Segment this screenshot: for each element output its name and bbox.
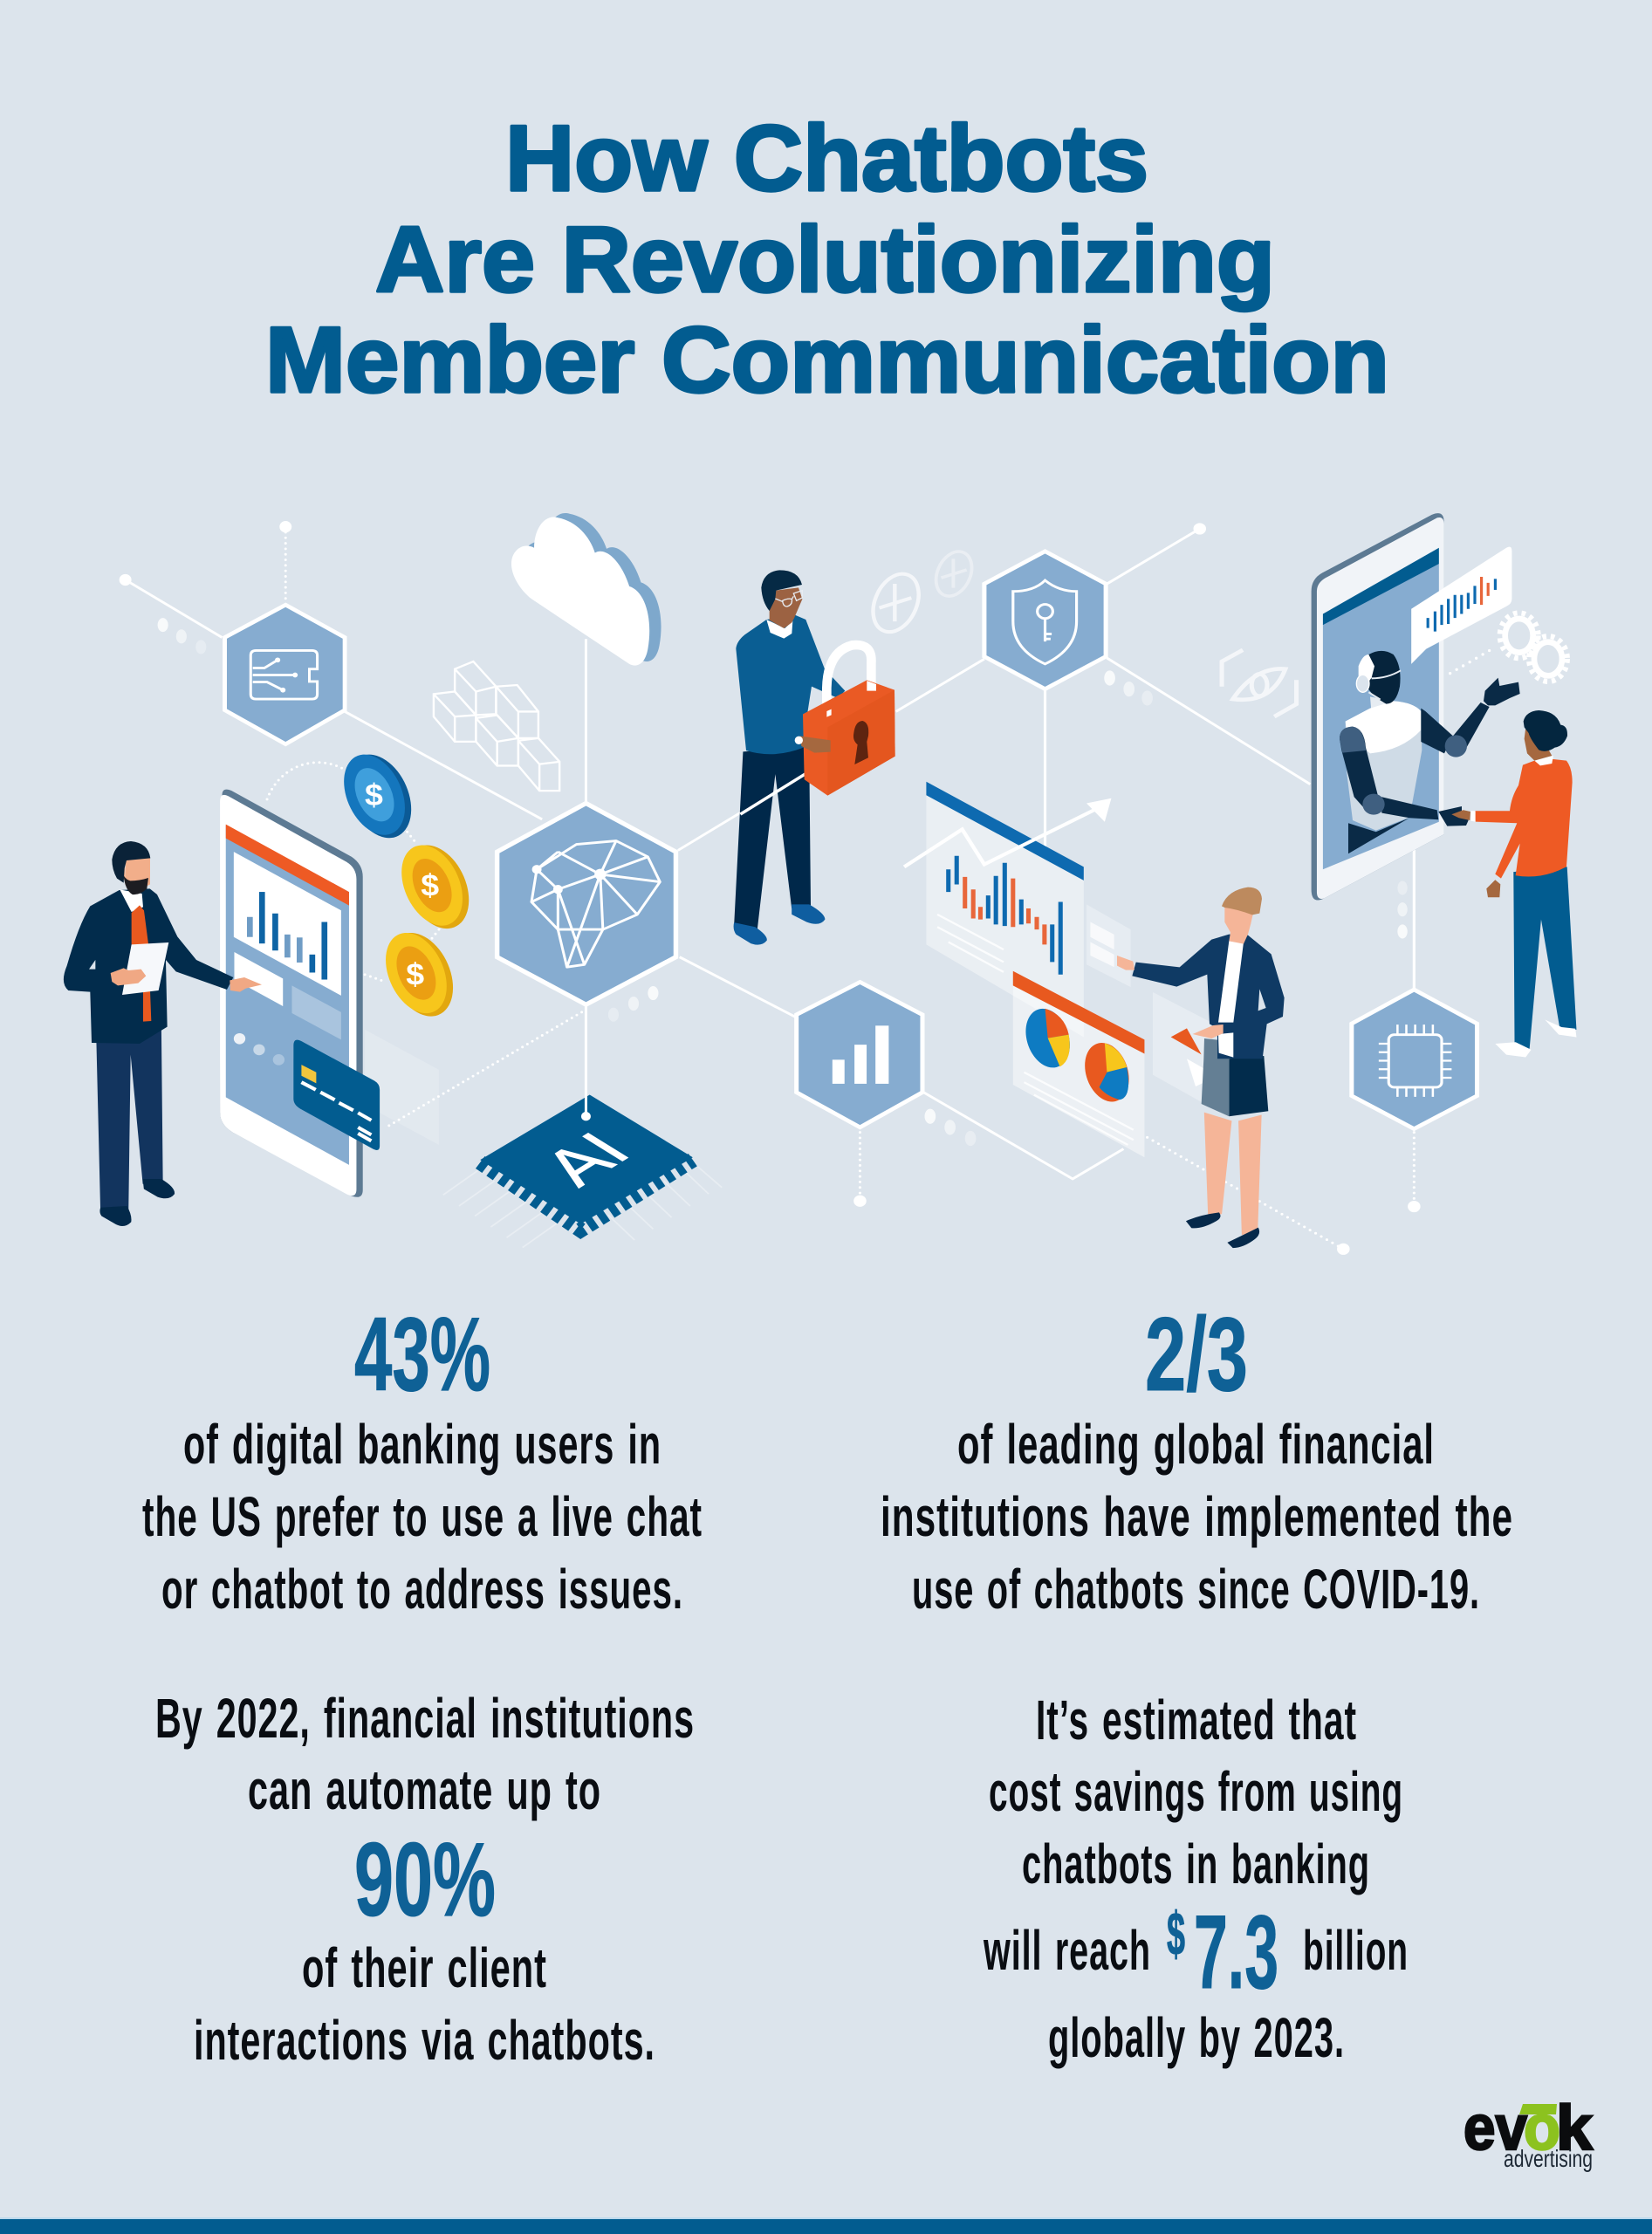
arrow bbox=[904, 798, 1111, 867]
robot and woman handshake bbox=[1340, 613, 1573, 897]
logo: evok advertising: k bbox=[1556, 2094, 1594, 2163]
woman cuff bbox=[1470, 811, 1476, 822]
stat: 7.3 billion bbox=[983, 1689, 1409, 2069]
sweater bbox=[736, 615, 845, 754]
pie chart 1 bbox=[1019, 1004, 1077, 1072]
icon: circuit hexagon bbox=[225, 605, 345, 744]
beard bbox=[124, 875, 148, 894]
stat: two thirds bbox=[881, 1296, 1513, 1621]
stat text: It’s estimated that bbox=[1036, 1689, 1357, 1751]
pointing hand bbox=[230, 977, 262, 992]
icon: plus circles bbox=[865, 547, 978, 638]
tablet screen bbox=[1323, 564, 1439, 869]
face bbox=[117, 858, 150, 890]
stat text bbox=[142, 1413, 703, 1621]
chart panel bbox=[904, 782, 1111, 1038]
lower hand bbox=[1193, 1024, 1224, 1038]
white line over legs bbox=[740, 762, 825, 814]
gold coin: $ bbox=[421, 868, 439, 902]
neck and face bbox=[1224, 906, 1254, 944]
shirt bbox=[1218, 941, 1244, 1023]
person: woman in blazer legs bbox=[1186, 1113, 1262, 1248]
person: man with glasses bbox=[736, 570, 845, 754]
icon: isometric blocks bbox=[434, 661, 559, 791]
gears bbox=[1500, 613, 1567, 682]
speech bubble bbox=[1411, 547, 1511, 664]
phone shadow panel bbox=[365, 1030, 439, 1145]
AI chip: AI bbox=[527, 1122, 646, 1196]
connector lines bbox=[855, 524, 1419, 1253]
stat text: will reach bbox=[983, 1919, 1151, 1982]
skirt bbox=[1202, 1038, 1268, 1116]
keyhole bbox=[853, 721, 868, 764]
footer bar bbox=[0, 2217, 1652, 2234]
hand on lock bbox=[800, 736, 831, 753]
stat text: can automate up to bbox=[248, 1758, 601, 1821]
stat text bbox=[983, 1689, 1409, 2069]
stat text bbox=[881, 1413, 1513, 1621]
title: Member Communication bbox=[265, 307, 1389, 412]
stat text: chatbots in banking bbox=[1022, 1833, 1370, 1895]
credit card bbox=[293, 1040, 380, 1150]
second man trousers and shoes bbox=[734, 747, 825, 945]
phone bbox=[220, 790, 363, 1197]
pie panel bbox=[1013, 971, 1144, 1157]
man trousers and shoes bbox=[96, 1022, 175, 1226]
third panel bbox=[1153, 992, 1210, 1107]
title bbox=[265, 106, 1389, 412]
stat: 90 percent bbox=[155, 1687, 695, 2072]
stat text: of digital banking users in bbox=[183, 1413, 661, 1476]
pie chart 2 bbox=[1078, 1038, 1135, 1107]
tie bbox=[132, 905, 151, 1022]
robot right arm bbox=[1421, 678, 1520, 757]
brain hexagon bbox=[497, 803, 675, 1004]
chip hexagon bbox=[1352, 990, 1477, 1129]
chart hexagon bbox=[797, 982, 922, 1127]
icon: cloud bbox=[511, 513, 661, 666]
lock body bbox=[803, 680, 895, 796]
hair bbox=[1222, 887, 1262, 915]
blue coin: $ bbox=[365, 778, 383, 812]
holding hand bbox=[111, 968, 146, 985]
stat text: By 2022, financial institutions bbox=[155, 1687, 695, 1750]
illustration: right part bbox=[797, 513, 1576, 1253]
blue coin bbox=[332, 745, 423, 847]
stat text: the US prefer to use a live chat bbox=[142, 1485, 703, 1548]
red triangle bbox=[1171, 1028, 1202, 1054]
stat text: globally by 2023. bbox=[1048, 2006, 1345, 2069]
collar bbox=[766, 620, 792, 639]
jacket gap bbox=[89, 960, 95, 970]
woman left hand bbox=[1486, 880, 1500, 897]
chip shadow lines bbox=[443, 1162, 722, 1248]
stat text: of their client bbox=[302, 1936, 547, 1999]
shirt collar bbox=[120, 889, 143, 912]
illustration: left part bbox=[96, 513, 825, 1248]
shield hexagon bbox=[984, 552, 1106, 689]
logo: evok advertising: ev bbox=[1463, 2094, 1527, 2163]
bar chart bbox=[234, 852, 341, 996]
gold coin bbox=[374, 924, 465, 1025]
gold coin bbox=[390, 836, 481, 937]
stat text bbox=[194, 1936, 655, 2072]
stat text: or chatbot to address issues. bbox=[161, 1558, 683, 1621]
big number: $7.3: 7.3 bbox=[1194, 1894, 1278, 2011]
stat: 43 percent bbox=[142, 1296, 703, 1621]
big number: 90%: 90% bbox=[354, 1821, 496, 1938]
small panel bbox=[1086, 904, 1131, 987]
face bbox=[770, 587, 802, 628]
robot bottom bbox=[1348, 818, 1409, 853]
eye icon bbox=[1222, 650, 1297, 716]
big number: 43%: 43% bbox=[354, 1296, 490, 1413]
woman right hand bbox=[1451, 810, 1470, 820]
title: Are Revolutionizing bbox=[375, 207, 1275, 312]
robot left arm bbox=[1340, 727, 1438, 819]
paper bbox=[1218, 1032, 1233, 1058]
blazer bbox=[1132, 935, 1285, 1059]
robot hand bbox=[1438, 806, 1469, 826]
woman sweater bbox=[1475, 759, 1573, 879]
robot head bbox=[1356, 651, 1401, 704]
tablet bbox=[122, 942, 168, 995]
big number: $7.3 bbox=[1167, 1894, 1278, 2011]
connector lines bbox=[120, 522, 825, 1127]
woman face bbox=[1525, 727, 1552, 761]
logo: evok advertising: o bbox=[1524, 2094, 1560, 2163]
stat text: cost savings from using bbox=[989, 1760, 1403, 1823]
person: woman in blazer bbox=[1117, 887, 1285, 1116]
jacket bbox=[64, 888, 233, 1044]
title: How Chatbots bbox=[505, 106, 1148, 210]
white triangle bbox=[1187, 1059, 1217, 1086]
stat text: billion bbox=[1303, 1919, 1409, 1982]
big number: 2/3: 2/3 bbox=[1145, 1296, 1248, 1413]
stat text bbox=[155, 1687, 695, 1821]
woman collar bbox=[1534, 756, 1553, 765]
pointing hand bbox=[1117, 956, 1134, 970]
hair bbox=[112, 841, 150, 883]
glasses bbox=[775, 591, 802, 606]
icon: coins bbox=[332, 745, 481, 1025]
candle bars bbox=[949, 856, 1060, 975]
tablet bbox=[1312, 513, 1444, 901]
logo: evok advertising: advertising bbox=[1504, 2145, 1593, 2172]
person: woman trousers and shoes bbox=[1495, 867, 1576, 1057]
hair bbox=[761, 570, 802, 611]
gold coin: $ bbox=[406, 956, 424, 991]
big number: $7.3: $ bbox=[1167, 1900, 1185, 1968]
shackle bbox=[826, 645, 871, 716]
dotted line to gears bbox=[1450, 648, 1495, 674]
robot neck bbox=[1370, 696, 1394, 714]
woman hair bbox=[1524, 710, 1567, 751]
AI chip bbox=[443, 1004, 722, 1248]
phone screen bbox=[226, 826, 349, 1165]
logo: evok advertising bbox=[1463, 2094, 1594, 2172]
robot torso bbox=[1346, 701, 1422, 831]
stat text: interactions via chatbots. bbox=[194, 2009, 655, 2072]
person: man with tablet bbox=[64, 841, 262, 1044]
padlock bbox=[795, 645, 895, 796]
